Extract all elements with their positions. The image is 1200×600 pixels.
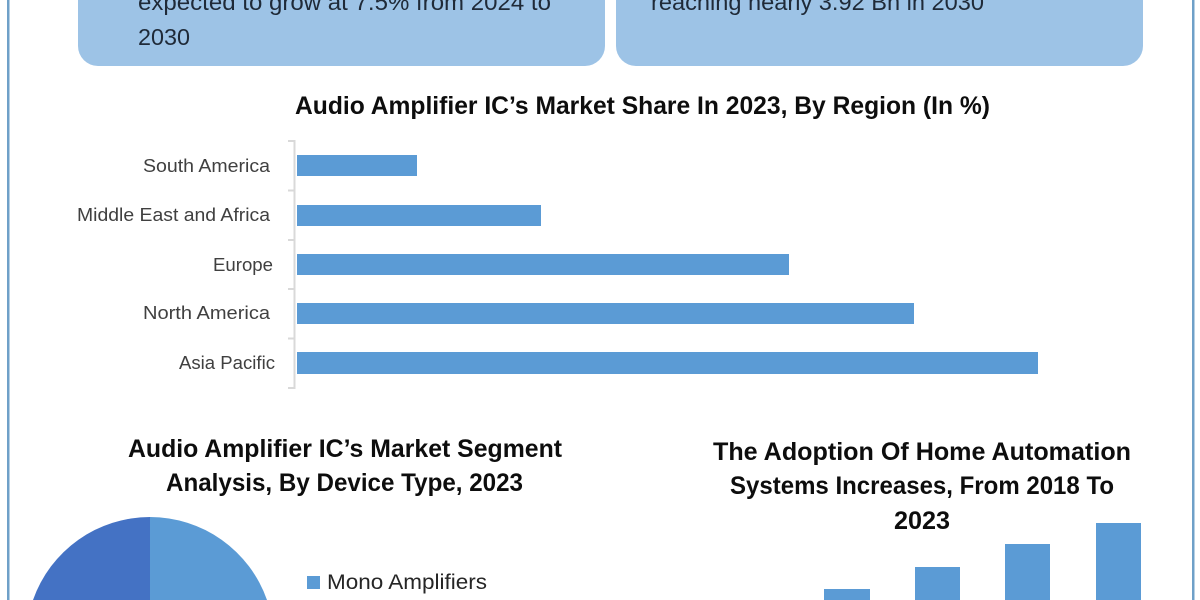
bar: Middle East and Africa: Middle East and Africa: [77, 204, 271, 225]
heading: market segment analysis: Audio Amplifier IC’s Market Segment: [128, 435, 563, 463]
bar chart: market share by region: [77, 141, 1038, 388]
heading: market share by region: Audio Amplifier IC’s Market Share In 2023, By Region (In %): [295, 92, 990, 120]
heading: market segment analysis: [128, 435, 563, 497]
heading: home automation adoption: 2023: [894, 507, 950, 535]
bar: North America: [143, 302, 914, 324]
bar: North America: North America: [143, 302, 271, 323]
bar: Europe: [213, 254, 789, 275]
legend: Mono Amplifiers: Mono Amplifiers: [327, 571, 487, 594]
bar: Middle East and Africa: [77, 204, 541, 226]
bar: South America: [143, 155, 417, 176]
heading: home automation adoption: [713, 438, 1131, 535]
bar: Asia Pacific: Asia Pacific: [179, 352, 275, 373]
panel: market value callout: [616, 0, 1143, 66]
heading: home automation adoption: The Adoption Of Home Automation: [713, 438, 1131, 466]
bar: Asia Pacific: [179, 352, 1038, 374]
column chart: home automation adoption: [824, 523, 1141, 600]
panel: market growth callout: 2030: [138, 24, 190, 50]
bar: South America: South America: [143, 155, 271, 176]
pie chart: device type: [33, 517, 267, 600]
panel: market growth callout: [78, 0, 605, 66]
bar: Europe: Europe: [213, 254, 273, 275]
heading: market segment analysis: Analysis, By Device Type, 2023: [166, 469, 523, 497]
heading: home automation adoption: Systems Increases, From 2018 To: [730, 472, 1114, 500]
